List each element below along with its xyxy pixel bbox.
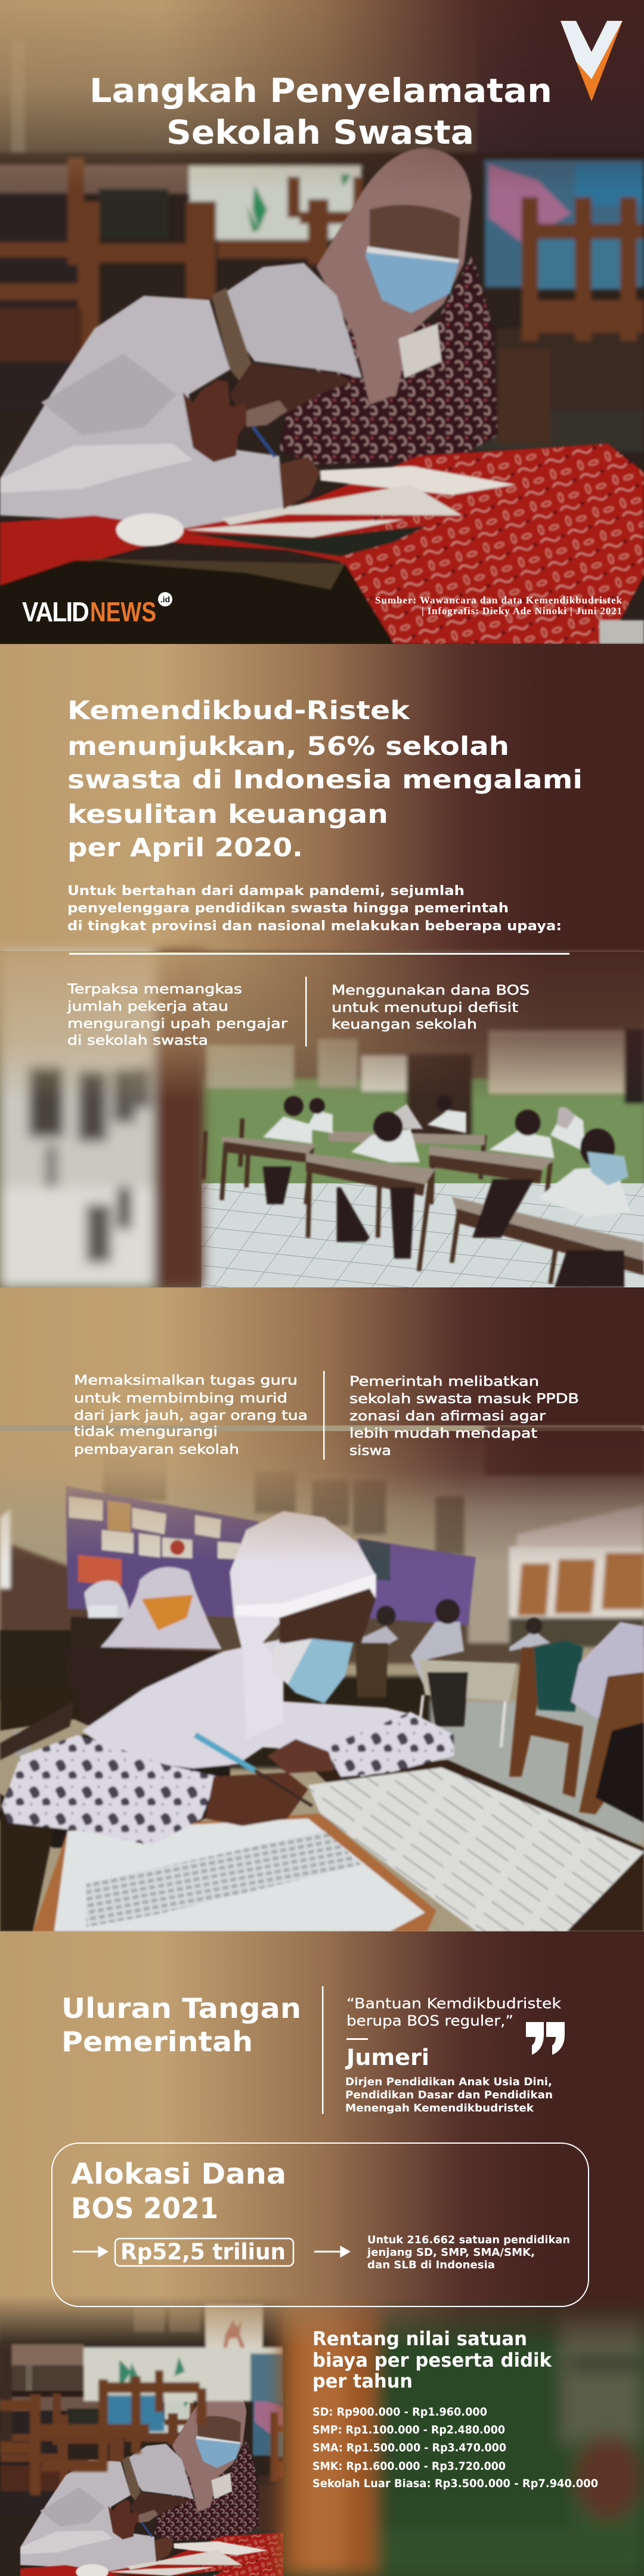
effort 4 text: zonasi dan afirmasi agar (349, 1409, 546, 1424)
allocation text (367, 2234, 570, 2271)
headline: 56% sekolah swasta: per April 2020. (67, 833, 303, 863)
quote text: “Bantuan Kemdikbudristek (346, 1995, 561, 2012)
quote attribution: Jumeri (345, 2045, 429, 2070)
headline: 56% sekolah swasta: kesulitan keuangan (67, 800, 388, 829)
headline: 56% sekolah swasta: menunjukkan, 56% sekolah (67, 732, 509, 761)
amount box: Rp52,5 triliun (120, 2239, 286, 2265)
quote attribution: Menengah Kemendikbudristek (345, 2102, 534, 2114)
list: unit cost values: SD: Rp900.000 - Rp1.960.000 (312, 2405, 487, 2419)
effort 2 text: keuangan sekolah (332, 1017, 477, 1032)
panel: classroom photo (0, 937, 644, 1305)
arrow (314, 2247, 349, 2256)
panel: hero photo (0, 0, 644, 644)
list: unit cost values: SMK: Rp1.600.000 - Rp3.720.000 (312, 2460, 506, 2473)
effort 3 text: untuk membimbing murid (74, 1391, 287, 1406)
source credit (375, 595, 623, 617)
effort 1 text: Terpaksa memangkas (67, 982, 242, 997)
quote text (346, 1995, 561, 2029)
source credit: | Infografis: Dieky Ade Ninoki | Juni 2021 (422, 605, 622, 617)
logo: Validnews (22, 592, 172, 627)
headline: 56% sekolah swasta: Kemendikbud-Ristek (67, 696, 411, 726)
effort 3 text (74, 1373, 308, 1457)
heading: Alokasi Dana: BOS 2021 (71, 2192, 218, 2225)
effort 1 text: mengurangi upah pengajar (67, 1017, 288, 1032)
effort 1 text: di sekolah swasta (67, 1033, 208, 1048)
effort 2 text (332, 983, 530, 1032)
divider line (69, 953, 569, 955)
title: Sekolah Swasta (166, 113, 474, 151)
intro text: di tingkat provinsi dan nasional melakukan beberapa upaya: (67, 919, 562, 934)
icon: V logo (561, 21, 623, 101)
effort 1 text: jumlah pekerja atau (67, 999, 228, 1014)
heading: unit cost range: per tahun (312, 2370, 413, 2392)
quote attribution: Dirjen Pendidikan Anak Usia Dini, (345, 2076, 552, 2088)
quote attribution (345, 2045, 553, 2114)
allocation text: jenjang SD, SMP, SMA/SMK, (367, 2246, 535, 2259)
allocation text: Untuk 216.662 satuan pendidikan (367, 2234, 570, 2246)
allocation text: dan SLB di Indonesia (367, 2259, 495, 2271)
effort 4 text: siswa (349, 1444, 391, 1459)
intro text: Untuk bertahan dari dampak pandemi, sejumlah (67, 884, 465, 899)
source credit: Sumber: Wawancara dan data Kemendikbudristek (375, 595, 623, 606)
effort 4 text: lebih mudah mendapat (349, 1426, 537, 1441)
logo: Validnews: .id (160, 595, 170, 604)
quote attribution: Pendidikan Dasar dan Pendidikan (345, 2089, 553, 2101)
title (89, 72, 552, 151)
effort 2 text: Menggunakan dana BOS (332, 983, 530, 998)
quote text: berupa BOS reguler,” (346, 2012, 513, 2029)
effort 2 text: untuk menutupi defisit (332, 1001, 518, 1015)
list: unit cost values (312, 2405, 598, 2490)
effort 4 text: sekolah swasta masuk PPDB (349, 1392, 579, 1407)
intro text (67, 884, 562, 934)
effort 3 text: tidak mengurangi (74, 1425, 218, 1439)
effort 3 text: dari jark jauh, agar orang tua (74, 1408, 308, 1423)
heading: Alokasi Dana: Alokasi Dana (71, 2157, 286, 2191)
logo: Validnews: VALID (22, 596, 89, 627)
heading: Uluran Tangan Pemerintah: Pemerintah (61, 2026, 253, 2058)
heading: Uluran Tangan Pemerintah: Uluran Tangan (61, 1992, 301, 2024)
intro text: penyelenggara pendidikan swasta hingga pemerintah (67, 901, 509, 916)
list: unit cost values: Sekolah Luar Biasa: Rp3.500.000 - Rp7.940.000 (312, 2477, 598, 2490)
list: unit cost values: SMA: Rp1.500.000 - Rp3.470.000 (312, 2441, 506, 2454)
effort 4 text (349, 1374, 579, 1459)
heading: unit cost range (312, 2327, 552, 2392)
panel: Alokasi Dana BOS 2021 (52, 2143, 589, 2306)
heading: unit cost range: biaya per peserta didik (312, 2349, 552, 2371)
effort 3 text: pembayaran sekolah (74, 1442, 239, 1457)
effort 3 text: Memaksimalkan tugas guru (74, 1373, 298, 1388)
headline: 56% sekolah swasta: swasta di Indonesia mengalami (67, 765, 583, 795)
logo: Validnews: NEWS (90, 596, 156, 627)
effort 4 text: Pemerintah melibatkan (349, 1374, 539, 1389)
panel: bottom photo and blurred wall (0, 2298, 644, 2576)
panel: exam photo (0, 1425, 644, 1931)
title: Langkah Penyelamatan (89, 72, 552, 110)
arrow (73, 2247, 107, 2256)
heading: Alokasi Dana (71, 2157, 286, 2225)
heading: unit cost range: Rentang nilai satuan (312, 2327, 527, 2350)
effort 1 text (67, 982, 288, 1048)
headline: 56% sekolah swasta (67, 696, 583, 863)
list: unit cost values: SMP: Rp1.100.000 - Rp2.480.000 (312, 2423, 505, 2436)
icon: quotation marks (526, 2022, 565, 2055)
heading: Uluran Tangan Pemerintah (61, 1992, 301, 2058)
